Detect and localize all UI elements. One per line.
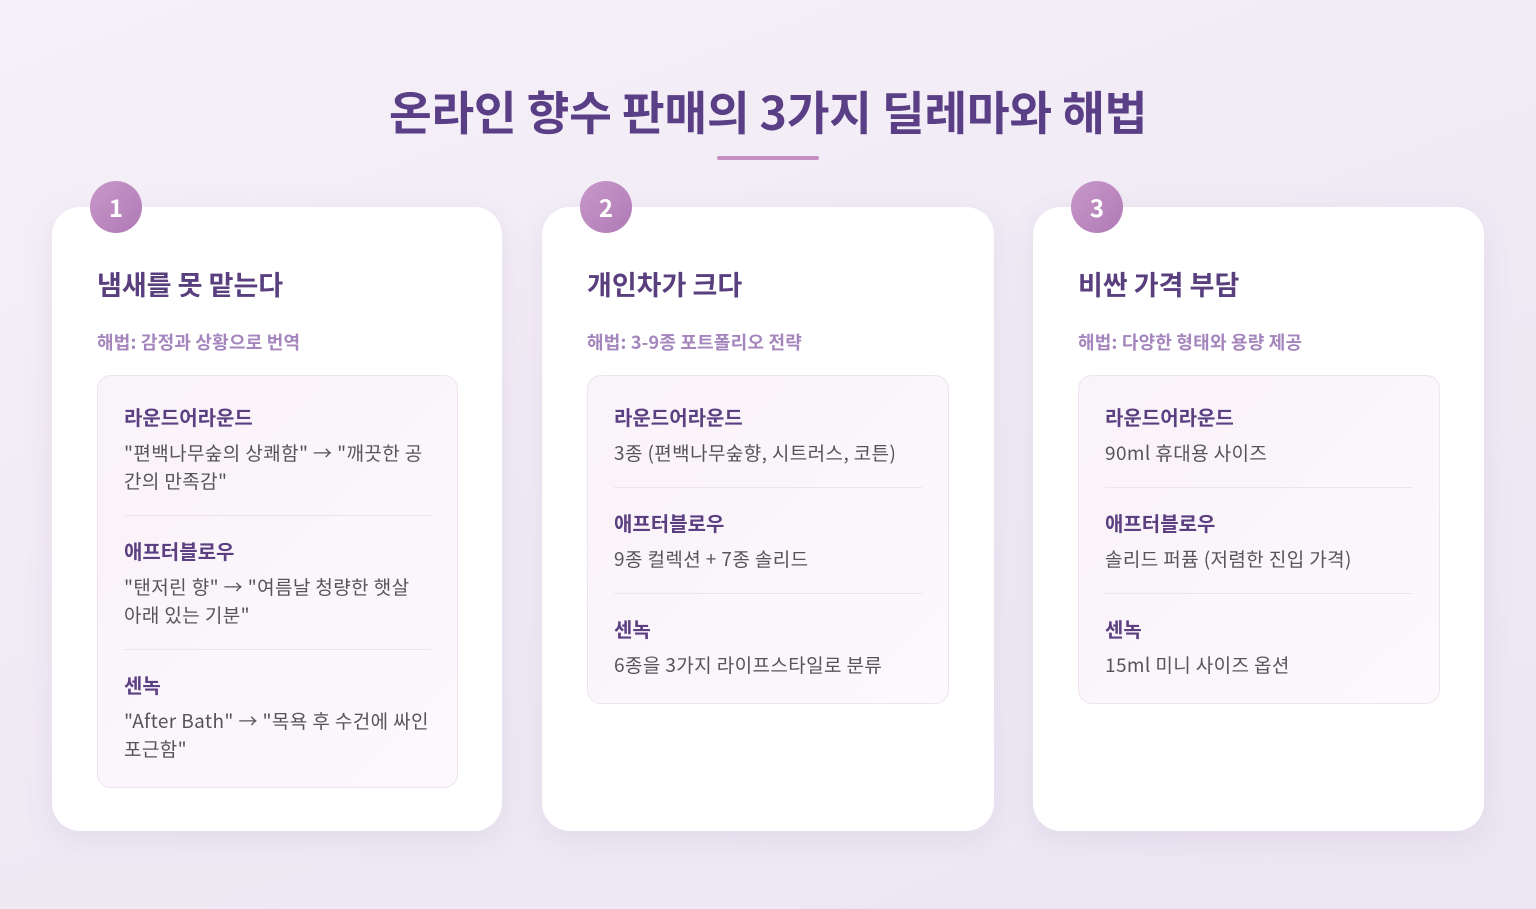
examples 3: 라운드어라운드 [1105,402,1234,431]
subtitle 2: 해법: 3-9종 포트폴리오 전략 [587,329,802,355]
examples 3: 애프터블로우 [1105,508,1215,537]
examples 2: 애프터블로우 [614,508,724,537]
examples 1 [97,375,458,788]
badge 3: 3 [1090,189,1104,224]
badge 2: 2 [599,189,613,224]
heading 1: 냄새를 못 맡는다 [97,264,283,303]
badge 3 [1071,181,1123,233]
panel: 3 [1033,207,1484,831]
examples 1: 애프터블로우 [124,536,234,565]
badge 1 [90,181,142,233]
examples 1: 센녹 [124,670,161,699]
subtitle 1: 해법: 감정과 상황으로 번역 [97,329,300,355]
panel: 1 [52,207,502,831]
examples 3 [1078,375,1440,704]
examples 3: 15ml 미니 사이즈 옵션 [1105,651,1290,678]
examples 2: 3종 (편백나무숲향, 시트러스, 코튼) [614,439,896,466]
heading 2: 개인차가 크다 [587,264,742,303]
title: 온라인 향수 판매의 3가지 딜레마와 해법 [389,77,1147,144]
examples 2: 라운드어라운드 [614,402,743,431]
examples 2: 9종 컬렉션 + 7종 솔리드 [614,545,808,572]
badge 2 [580,181,632,233]
examples 2: 센녹 [614,614,651,643]
examples 1: "탠저린 향" → "여름날 청량한 햇살 아래 있는 기분" [124,573,409,628]
subtitle 3: 해법: 다양한 형태와 용량 제공 [1078,329,1302,355]
examples 2 [587,375,949,704]
examples 1: 라운드어라운드 [124,402,253,431]
examples 1: "편백나무숲의 상쾌함" → "깨끗한 공간의 만족감" [124,439,423,494]
examples 1: "After Bath" → "목욕 후 수건에 싸인 포근함" [124,707,429,762]
examples 2: 6종을 3가지 라이프스타일로 분류 [614,651,882,678]
heading 3: 비싼 가격 부담 [1078,264,1239,303]
panel: 2 [542,207,994,831]
examples 3: 90ml 휴대용 사이즈 [1105,439,1267,466]
examples 3: 솔리드 퍼퓸 (저렴한 진입 가격) [1105,545,1352,572]
examples 3: 센녹 [1105,614,1142,643]
badge 1: 1 [109,189,123,224]
